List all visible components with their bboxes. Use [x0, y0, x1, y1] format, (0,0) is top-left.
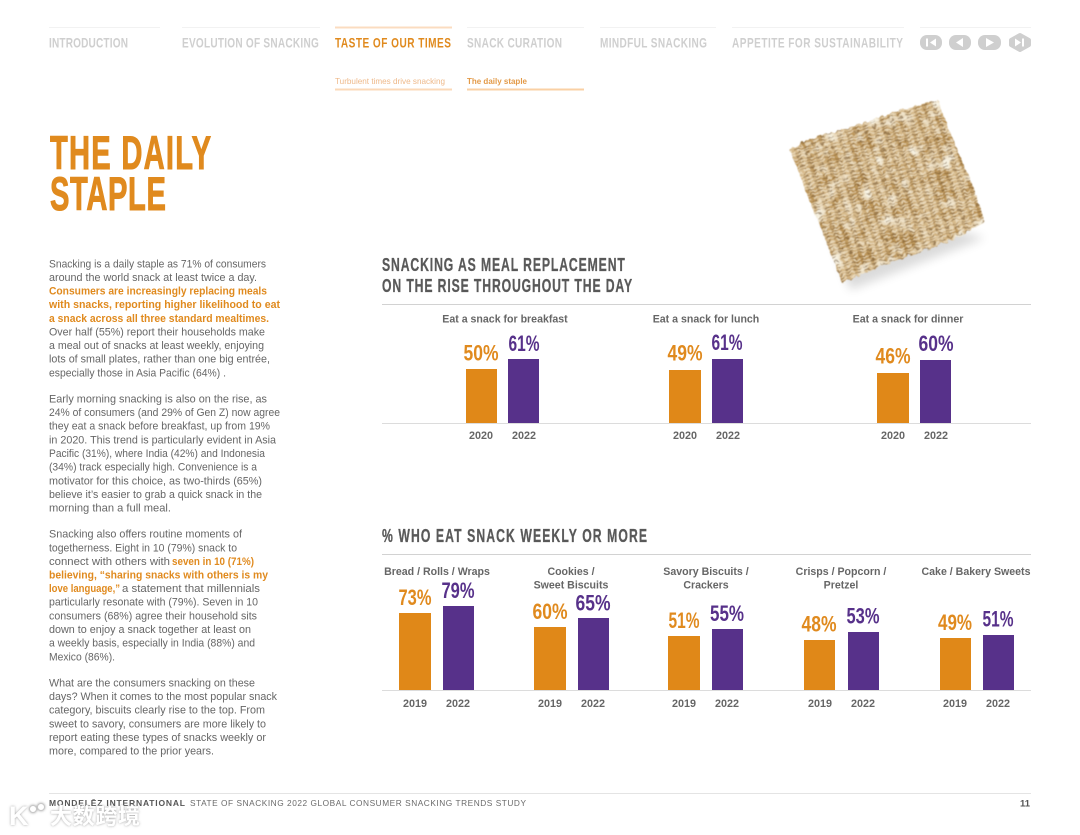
top navigation: TASTE OF OUR TIMES: [335, 35, 451, 51]
watermark: [9, 801, 140, 831]
paragraph 2: Pacific (31%), where India (42%) and Indonesia: [49, 448, 265, 460]
bread / rolls / wraps: 2019: [403, 698, 427, 710]
crisps / popcorn / pretzel: 48%: [802, 612, 836, 636]
paragraph 1: around the world snack at least twice a day.: [49, 272, 257, 284]
cookies / sweet biscuits: [532, 566, 610, 710]
crisps / popcorn / pretzel: [796, 566, 886, 710]
breakfast bars: 2022: [512, 430, 536, 442]
lunch bars: 49%: [668, 340, 702, 366]
cake / bakery sweets: Cake / Bakery Sweets: [922, 566, 1031, 578]
paragraph 1: Over half (55%) report their households make: [49, 326, 265, 338]
dinner bars: [853, 314, 963, 442]
breakfast bars: 2020: [469, 430, 493, 442]
bread / rolls / wraps: Bread / Rolls / Wraps: [384, 566, 490, 578]
paragraph 1: [48, 258, 280, 380]
bread / rolls / wraps: [384, 566, 490, 710]
top navigation: MINDFUL SNACKING: [600, 35, 707, 51]
paragraph 1: especially those in Asia Pacific (64%) .: [49, 368, 226, 380]
paragraph 2: they eat a snack before breakfast, up from 19%: [49, 420, 271, 432]
savory biscuits / crackers: Savory Biscuits /: [663, 566, 749, 578]
crisps / popcorn / pretzel: 2022: [851, 698, 875, 710]
paragraph 3: [49, 528, 268, 664]
crisps / popcorn / pretzel: 53%: [846, 604, 880, 628]
paragraph 3: particularly resonate with (79%). Seven in 10: [49, 596, 258, 608]
cake / bakery sweets: 2019: [943, 698, 967, 710]
cookies / sweet biscuits: Sweet Biscuits: [534, 580, 608, 592]
paragraph 1: a meal out of snacks at least weekly, enjoying: [49, 340, 264, 352]
cake / bakery sweets: 51%: [982, 606, 1014, 632]
dinner bars: 60%: [918, 331, 954, 356]
footer: MONDELĒZ INTERNATIONAL: [49, 798, 185, 808]
section sub-navigation: [335, 76, 584, 90]
paragraph 3: a statement that millennials: [122, 583, 260, 595]
footer: 11: [1020, 798, 1031, 810]
top navigation: EVOLUTION OF SNACKING: [182, 35, 319, 51]
savory biscuits / crackers: 2022: [715, 698, 739, 710]
breakfast bars: 61%: [508, 331, 540, 356]
paragraph 3: seven in 10 (71%): [172, 556, 254, 568]
crisps / popcorn / pretzel: Pretzel: [824, 580, 858, 592]
savory biscuits / crackers: 51%: [668, 608, 700, 633]
heading: snacking as meal replacement: ON THE RISE THROUGHOUT THE DAY: [382, 277, 633, 297]
bread / rolls / wraps: 79%: [442, 578, 474, 603]
lunch bars: Eat a snack for lunch: [653, 314, 759, 326]
crisps / popcorn / pretzel: Crisps / Popcorn /: [796, 566, 886, 578]
dinner bars: Eat a snack for dinner: [853, 314, 963, 326]
paragraph 3: down to enjoy a snack together at least on: [49, 624, 251, 636]
cake / bakery sweets: [922, 566, 1031, 710]
paragraph 3: togetherness. Eight in 10 (79%) snack to: [49, 542, 237, 554]
paragraph 3: Snacking also offers routine moments of: [49, 528, 242, 540]
intro text column: [48, 258, 280, 758]
paragraph 3: a weekly basis, especially in India (88%) and: [49, 638, 255, 650]
paragraph 4: [49, 678, 278, 758]
lunch bars: [653, 314, 759, 442]
heading: % who eat snack weekly: % WHO EAT SNACK WEEKLY OR MORE: [382, 527, 647, 547]
dinner bars: 46%: [876, 344, 910, 368]
top navigation: [49, 26, 1031, 51]
cookies / sweet biscuits: 2022: [581, 698, 605, 710]
breakfast bars: Eat a snack for breakfast: [442, 314, 568, 326]
cookies / sweet biscuits: 2019: [538, 698, 562, 710]
breakfast bars: [442, 314, 568, 442]
top navigation: INTRODUCTION: [49, 35, 128, 51]
cookies / sweet biscuits: 65%: [576, 590, 610, 616]
image: square wheat cracker: [788, 100, 985, 291]
savory biscuits / crackers: Crackers: [683, 580, 729, 592]
footer: STATE OF SNACKING 2022 GLOBAL CONSUMER SNACKING TRENDS STUDY: [190, 798, 526, 808]
bread / rolls / wraps: 73%: [398, 585, 432, 610]
paragraph 1: a snack across all three standard mealtimes.: [49, 313, 269, 325]
paragraph 2: Early morning snacking is also on the rise, as: [49, 394, 267, 406]
paragraph 2: morning than a full meal.: [49, 502, 171, 514]
dinner bars: 2022: [924, 430, 948, 442]
cake / bakery sweets: 2022: [986, 698, 1010, 710]
top navigation: SNACK CURATION: [467, 35, 562, 51]
heading: snacking as meal replacement: SNACKING AS MEAL REPLACEMENT: [382, 256, 625, 276]
paragraph 4: more, compared to the prior years.: [49, 746, 214, 758]
paragraph 3: Mexico (86%).: [49, 652, 115, 664]
title: STAPLE: [50, 169, 166, 221]
cake / bakery sweets: 49%: [938, 610, 972, 635]
paragraph 1: lots of small plates, rather than one big entrée,: [49, 354, 270, 366]
paragraph 2: believe it’s easier to grab a quick snack in the: [49, 489, 262, 501]
paragraph 3: consumers (68%) agree their household sits: [49, 610, 257, 622]
lunch bars: 2020: [673, 430, 697, 442]
paragraph 2: [49, 394, 280, 514]
watermark: 大数跨境: [50, 804, 140, 829]
savory biscuits / crackers: [663, 566, 749, 710]
paragraph 4: category, biscuits clearly rise to the top. From: [49, 704, 265, 716]
cookies / sweet biscuits: 60%: [532, 599, 568, 624]
section sub-navigation: Turbulent times drive snacking: [335, 76, 445, 86]
bread / rolls / wraps: 2022: [446, 698, 470, 710]
paragraph 2: in 2020. This trend is particularly evident in Asia: [49, 434, 276, 446]
paragraph 4: sweet to savory, consumers are more likely to: [49, 718, 266, 730]
breakfast bars: 50%: [464, 340, 498, 366]
lunch bars: 61%: [712, 330, 742, 355]
paragraph 3: connect with others with: [49, 556, 170, 568]
top navigation: APPETITE FOR SUSTAINABILITY: [732, 35, 903, 51]
paragraph 1: Consumers are increasingly replacing meals: [49, 286, 267, 298]
paragraph 3: love language,”: [49, 583, 120, 595]
crisps / popcorn / pretzel: 2019: [808, 698, 832, 710]
paragraph 2: motivator for this choice, as two-thirds (65%): [49, 476, 262, 488]
chart: meal replacement: [382, 314, 1031, 442]
heading: snacking as meal replacement: [382, 256, 633, 297]
savory biscuits / crackers: 55%: [710, 601, 744, 626]
paragraph 1: Snacking is a daily staple as 71% of consumers: [49, 258, 266, 270]
paragraph 4: report eating these types of snacks weekly or: [49, 732, 266, 744]
dinner bars: 2020: [881, 430, 905, 442]
title: [50, 128, 211, 221]
savory biscuits / crackers: 2019: [672, 698, 696, 710]
chart: weekly snack categories: [382, 566, 1031, 710]
section sub-navigation: The daily staple: [467, 76, 527, 86]
watermark: K: [9, 801, 29, 831]
cookies / sweet biscuits: Cookies /: [547, 566, 595, 578]
paragraph 4: What are the consumers snacking on these: [49, 678, 255, 690]
paragraph 3: believing, “sharing snacks with others is my: [49, 570, 268, 582]
title: THE DAILY: [50, 128, 211, 180]
paragraph 2: (34%) track especially high. Convenience is a: [49, 462, 257, 474]
paragraph 4: days? When it comes to the most popular snack: [49, 691, 278, 703]
navigation buttons: [920, 35, 1029, 50]
footer: [49, 794, 1031, 810]
paragraph 1: with snacks, reporting higher likelihood to eat: [48, 299, 280, 311]
paragraph 2: 24% of consumers (and 29% of Gen Z) now agree: [49, 407, 280, 419]
lunch bars: 2022: [716, 430, 740, 442]
